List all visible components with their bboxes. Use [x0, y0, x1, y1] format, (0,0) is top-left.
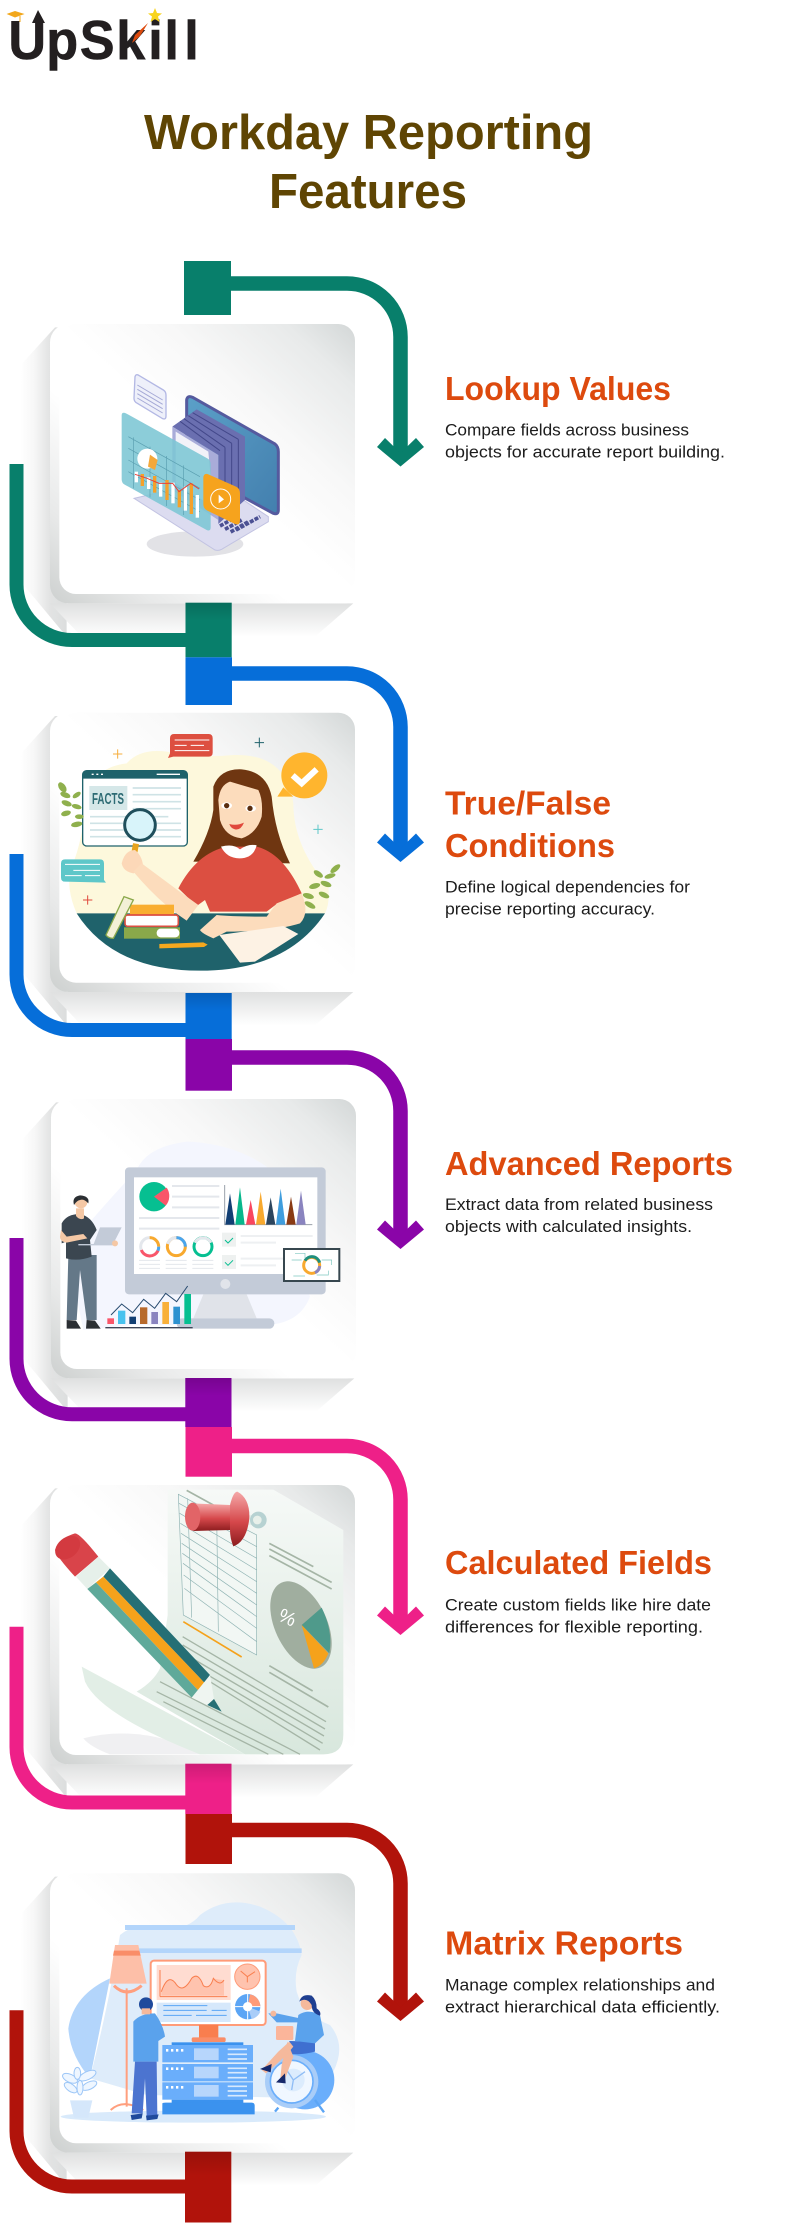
block: pink lower — [185, 1764, 232, 1814]
illustration: laptop with reports — [122, 375, 278, 557]
description: Extract data from related business — [445, 1195, 713, 1214]
heading: Advanced Reports — [445, 1145, 733, 1182]
connector: red return — [16, 2010, 186, 2186]
description — [445, 1976, 720, 2016]
block: blue top — [186, 657, 232, 705]
description: Compare fields across business — [445, 420, 689, 440]
description: Create custom fields like hire date — [445, 1595, 711, 1614]
illustration: pencil and document — [51, 1490, 344, 1754]
heading: Conditions — [445, 827, 615, 864]
block: teal top — [184, 261, 231, 315]
block: purple top — [186, 1039, 232, 1091]
heading: Calculated Fields — [445, 1544, 712, 1581]
illustration: dashboard monitor — [60, 1142, 339, 1330]
connector: blue return — [16, 854, 186, 1030]
block: teal lower — [186, 603, 232, 657]
panel: step 4 Calculated Fields — [16, 1427, 712, 1814]
connector: purple return — [16, 1238, 186, 1414]
heading: True/False — [445, 784, 611, 822]
heading: Lookup Values — [445, 370, 671, 407]
illustration: pencil and document: % — [275, 1605, 299, 1632]
block: pink top — [186, 1427, 232, 1477]
arrow: teal — [231, 284, 424, 466]
icon: yellow star — [148, 8, 162, 22]
illustration: team at server dashboard — [61, 1902, 339, 2123]
connector: pink return — [16, 1627, 186, 1802]
description — [445, 878, 690, 918]
illustration: woman with facts: FACTS — [92, 791, 124, 808]
description: Define logical dependencies for — [445, 878, 690, 896]
description: objects with calculated insights. — [445, 1217, 692, 1236]
block: purple lower — [185, 1378, 232, 1427]
card — [20, 1873, 363, 2186]
card — [20, 713, 363, 1025]
description: precise reporting accuracy. — [445, 900, 655, 918]
description: Manage complex relationships and — [445, 1976, 715, 1995]
title: Features — [269, 165, 467, 219]
heading — [445, 784, 615, 864]
heading: Matrix Reports — [445, 1925, 683, 1962]
description: objects for accurate report building. — [445, 442, 725, 462]
block: blue lower — [186, 993, 232, 1039]
logo: UpSkill: UpSkill — [8, 10, 199, 71]
panel: step 2 True/False Conditions — [16, 657, 690, 1039]
illustration: woman with facts — [56, 734, 342, 971]
connector: teal return — [16, 464, 186, 640]
arrow: red — [231, 1830, 424, 2021]
description — [445, 1595, 711, 1637]
panel: step 3 Advanced Reports — [16, 1039, 733, 1427]
title: Workday Reporting — [144, 106, 593, 160]
description: extract hierarchical data efficiently. — [445, 1998, 720, 2016]
block: red top — [186, 1814, 232, 1864]
icon: up arrow on U — [32, 10, 45, 23]
description — [445, 1195, 713, 1236]
arrow: blue — [231, 674, 424, 862]
icon: orange flame on k — [132, 23, 148, 43]
arrow: purple — [231, 1058, 424, 1249]
block: red lower — [185, 2152, 231, 2222]
card — [20, 1485, 363, 1798]
description: differences for flexible reporting. — [445, 1618, 703, 1637]
arrow: pink — [231, 1446, 424, 1635]
card — [21, 1099, 364, 1412]
icon: graduation cap — [8, 12, 23, 22]
panel: step 5 Matrix Reports — [16, 1814, 720, 2222]
panel: step 1 Lookup Values — [16, 261, 725, 657]
title — [144, 106, 593, 219]
description — [445, 420, 725, 462]
card — [20, 324, 363, 637]
